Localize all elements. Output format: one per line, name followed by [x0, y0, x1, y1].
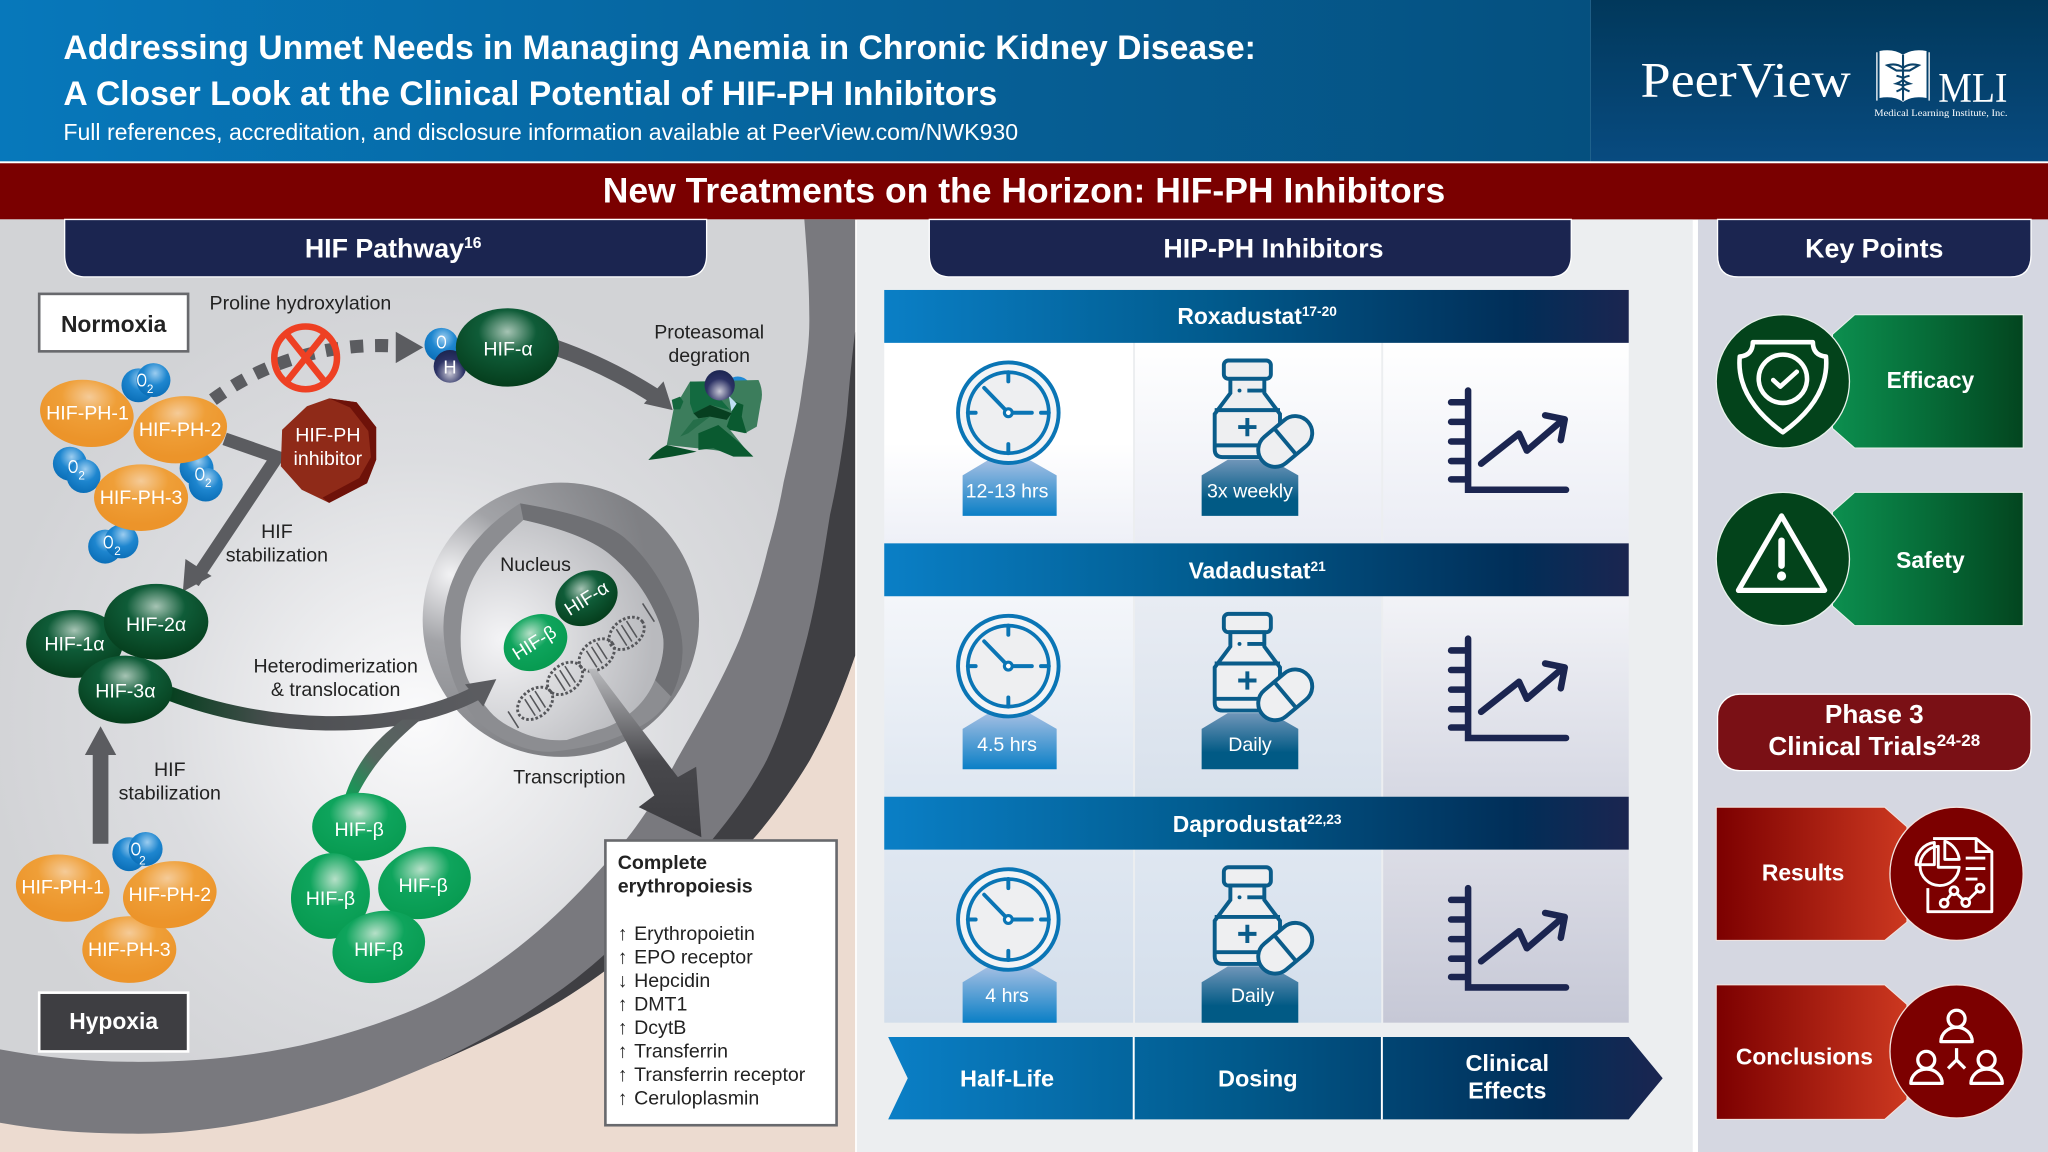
arrow: HIF-beta to nucleus [345, 720, 421, 797]
section band: New Treatments on the Horizon: HIF-PH Inhibitors [603, 171, 1445, 210]
O2 molecule: 2 [114, 545, 121, 558]
row header [884, 290, 1629, 343]
callout: complete erythropoiesis: ↑ [618, 1040, 628, 1062]
icon: clinical effects chart [1451, 639, 1566, 738]
HIF-PH-1 [11, 849, 114, 928]
row header [884, 797, 1629, 850]
heading: HIF pathway: HIF Pathway [305, 233, 464, 263]
heading: key points [1718, 219, 2031, 277]
heading: HIF pathway [65, 219, 707, 277]
heading: HIF pathway: 16 [464, 235, 482, 252]
callout: complete erythropoiesis: ↑ [618, 1064, 628, 1086]
label: HIF stabilization (normoxia): stabilization [226, 545, 328, 567]
HIF-PH-2: HIF-PH-2 [128, 884, 211, 906]
HIF-beta [281, 844, 379, 948]
callout: complete erythropoiesis: Erythropoietin [634, 923, 755, 945]
logo: MLI book icon [1877, 50, 1929, 102]
hydroxylated HIF-alpha: H [443, 357, 457, 378]
DNA helix [508, 603, 654, 728]
panel: key points [1698, 219, 2048, 1152]
row: Daprodustat [884, 797, 1629, 1023]
callout: complete erythropoiesis: EPO receptor [634, 946, 753, 968]
O2 molecule: 2 [139, 855, 146, 868]
row header: Vadadustat [1189, 558, 1310, 584]
HIF-PH-1 [36, 374, 138, 453]
title: Addressing Unmet Needs in Managing Anemia in Chronic Kidney Disease: [63, 29, 1256, 67]
arrow: hypoxia stabilization [85, 726, 116, 844]
HIF-beta: HIF-β [335, 819, 384, 841]
dosing: 3x weekly [1202, 360, 1319, 516]
row header: 21 [1310, 559, 1326, 574]
HIF-PH-2 [119, 855, 221, 934]
callout: complete erythropoiesis: ↑ [618, 1087, 628, 1109]
label: HIF stabilization (hypoxia): HIF [154, 759, 186, 781]
half-life: 12-13 hrs: 12-13 hrs [966, 481, 1049, 503]
HIF-beta: HIF-β [354, 939, 403, 961]
HIF-3a [78, 656, 172, 724]
HIF-PH inhibitor: inhibitor [294, 448, 363, 470]
callout: complete erythropoiesis: ↑ [618, 923, 628, 945]
heading: phase 3 clinical trials: Clinical Trials [1768, 731, 1937, 761]
heading: HIP-PH inhibitors [929, 219, 1571, 277]
callout: complete erythropoiesis: DcytB [634, 1017, 686, 1039]
logo panel [1591, 0, 2048, 161]
HIF-2a: HIF-2α [126, 614, 186, 636]
heading: phase 3 clinical trials: 24-28 [1937, 731, 1980, 750]
O2 molecule: O [103, 532, 114, 553]
row header [884, 543, 1629, 596]
results tag: Results [1762, 859, 1844, 885]
callout: complete erythropoiesis: Transferrin [634, 1040, 728, 1062]
O2 molecule: 2 [78, 469, 85, 482]
half-life: 12-13 hrs [958, 362, 1059, 516]
normoxia label [39, 294, 188, 351]
logo: PeerView: PeerView [1640, 53, 1851, 108]
HIF-PH-3 [82, 916, 176, 983]
dosing: daily: Daily [1228, 734, 1272, 756]
normoxia label: Normoxia [61, 311, 167, 337]
column labels arrow: Effects [1468, 1077, 1546, 1103]
HIF-PH-1: HIF-PH-1 [21, 876, 104, 898]
callout: complete erythropoiesis: erythropoiesis [618, 876, 753, 898]
HIF-PH-2: HIF-PH-2 [139, 419, 222, 441]
label: HIF stabilization (normoxia): HIF [261, 521, 293, 543]
row header: 22,23 [1307, 812, 1342, 827]
icon: clinical effects chart [1451, 391, 1566, 490]
subtitle: references: Full references, accreditation, and disclosure information available at PeerView.com/NWK930 [63, 119, 1018, 145]
callout: complete erythropoiesis: Complete [618, 852, 707, 874]
dosing: daily [1202, 614, 1319, 769]
callout: complete erythropoiesis: ↑ [618, 946, 628, 968]
dosing: daily: Daily [1231, 985, 1275, 1007]
HIF-alpha in nucleus: HIF-α [561, 578, 613, 621]
icon: clinical effects chart [1451, 888, 1566, 987]
nucleus [423, 483, 699, 757]
HIF-beta: HIF-β [399, 875, 448, 897]
heading: key points: Key Points [1805, 233, 1943, 263]
label: proteasomal degration [654, 321, 764, 367]
O2 molecule [53, 447, 101, 493]
label: heterodimerization [254, 656, 418, 701]
efficacy tag: Efficacy [1887, 367, 1975, 393]
cell membrane [0, 219, 855, 1134]
O2 molecule [180, 451, 223, 502]
column labels arrow: Dosing [1218, 1066, 1298, 1092]
label: proteasomal degration: Proteasomal [654, 321, 764, 343]
label: nucleus: Nucleus [500, 554, 571, 576]
half-life: 4.5 hrs [958, 616, 1059, 769]
label: proline hydroxylation: Proline hydroxylation [210, 293, 391, 315]
HIF-beta [370, 837, 479, 929]
molecules: HIF-alpha group [26, 584, 208, 724]
O2 molecule [121, 363, 170, 402]
callout: complete erythropoiesis: Transferrin receptor [634, 1064, 806, 1086]
arrow: transcription [588, 669, 701, 837]
label: HIF stabilization (hypoxia) [119, 759, 221, 804]
label: HIF stabilization (normoxia) [226, 521, 328, 567]
arrow: to proteasome [555, 347, 673, 410]
column labels arrow [888, 1037, 1663, 1119]
callout: complete erythropoiesis: Hepcidin [634, 970, 710, 992]
row: Vadadustat [884, 543, 1629, 797]
title [63, 29, 1256, 113]
icon: report [1890, 807, 2023, 940]
proteasome [648, 370, 762, 460]
section band [0, 163, 2048, 219]
O2 molecule: O [131, 839, 141, 860]
O2 molecule [88, 524, 138, 564]
HIF-beta in nucleus: HIF-β [509, 622, 561, 665]
HIF-beta in nucleus [493, 603, 578, 682]
hypoxia label: Hypoxia [69, 1008, 158, 1034]
label: transcription: Transcription [513, 767, 626, 789]
O2 molecule: 2 [205, 477, 212, 490]
callout: complete erythropoiesis: ↓ [618, 970, 628, 992]
callout: complete erythropoiesis: Ceruloplasmin [634, 1087, 759, 1109]
label: proteasomal degration: degration [668, 345, 750, 367]
HIF-PH-3: HIF-PH-3 [100, 487, 182, 509]
safety tag [1716, 492, 2023, 626]
dosing: 3x weekly: 3x weekly [1207, 481, 1293, 503]
half-life: 4.5 hrs: 4.5 hrs [977, 734, 1037, 756]
half-life: 4 hrs [958, 869, 1059, 1023]
half-life: 4 hrs: 4 hrs [985, 985, 1029, 1007]
HIF-1a [26, 610, 123, 678]
label: heterodimerization: Heterodimerization [254, 656, 418, 678]
label: HIF stabilization (hypoxia): stabilization [119, 782, 221, 804]
callout: complete erythropoiesis: DMT1 [634, 993, 687, 1015]
hydroxylated HIF-alpha: O [436, 332, 447, 353]
HIF-beta [312, 793, 406, 861]
HIF-1a: HIF-1α [44, 633, 105, 655]
heading: phase 3 clinical trials: Phase 3 [1825, 699, 1924, 729]
HIF-alpha in nucleus [545, 559, 628, 637]
HIF-PH inhibitor: HIF-PH [295, 424, 360, 446]
dashed arrow: proline hydroxylation [213, 332, 423, 400]
conclusions tag: Conclusions [1736, 1043, 1873, 1069]
hydroxylated HIF-alpha: HIF-α [483, 338, 533, 360]
title: A Closer Look at the Clinical Potential of HIF-PH Inhibitors [63, 75, 997, 113]
HIF-3a: HIF-3α [95, 680, 156, 702]
icon: people [1890, 985, 2023, 1118]
panel: HIF pathway [0, 219, 855, 1152]
HIF-PH-3 [94, 464, 188, 531]
HIF-PH-2 [129, 390, 231, 469]
O2 molecule: 2 [147, 383, 153, 396]
heading: phase 3 clinical trials [1718, 694, 2031, 771]
HIF-beta: HIF-β [306, 888, 355, 910]
row header: 17-20 [1302, 304, 1337, 319]
callout: complete erythropoiesis [605, 840, 837, 1125]
O2 molecule: O [68, 456, 78, 477]
arrow: HIF stabilization from HIF-PH [183, 439, 277, 592]
HIF-PH-1: HIF-PH-1 [46, 402, 129, 424]
HIF-PH inhibitor [281, 398, 376, 503]
HIF-2a [104, 584, 208, 660]
O2 molecule: O [195, 464, 205, 485]
O2 molecule [112, 832, 163, 871]
hypoxia label [39, 993, 188, 1051]
column labels arrow: Half-Life [960, 1066, 1054, 1092]
results tag [1716, 807, 2023, 940]
icon: blocked X [274, 327, 337, 389]
icon: shield [1716, 315, 1849, 448]
icon: warning [1716, 492, 1849, 626]
logo: MLI: MLI [1938, 66, 2008, 112]
row header: Roxadustat [1177, 303, 1302, 329]
hydroxylated HIF-alpha [424, 308, 559, 387]
molecules: normoxia HIF-PH group [36, 363, 231, 564]
panel: HIF-PH inhibitors [857, 219, 1693, 1152]
header banner [0, 0, 1591, 161]
dosing: daily [1202, 867, 1319, 1023]
HIF-PH-3: HIF-PH-3 [88, 939, 171, 961]
efficacy tag [1716, 315, 2023, 448]
label: heterodimerization: & translocation [271, 679, 400, 701]
callout: complete erythropoiesis: ↑ [618, 993, 628, 1015]
row header: Daprodustat [1173, 811, 1307, 837]
O2 molecule: O [136, 370, 147, 391]
callout: complete erythropoiesis: ↑ [618, 1017, 628, 1039]
logo: institute name: Medical Learning Institute, Inc. [1874, 108, 2008, 119]
molecules: hypoxia HIF-PH group [11, 832, 221, 983]
conclusions tag [1716, 985, 2023, 1119]
column labels arrow: Clinical [1465, 1050, 1549, 1076]
molecules: HIF-beta group [281, 793, 479, 993]
heading: HIP-PH inhibitors: HIP-PH Inhibitors [1163, 233, 1384, 263]
safety tag: Safety [1896, 547, 1965, 573]
row: Roxadustat [884, 290, 1629, 543]
arrow: heterodimerization [170, 679, 496, 723]
HIF-beta [324, 901, 433, 993]
